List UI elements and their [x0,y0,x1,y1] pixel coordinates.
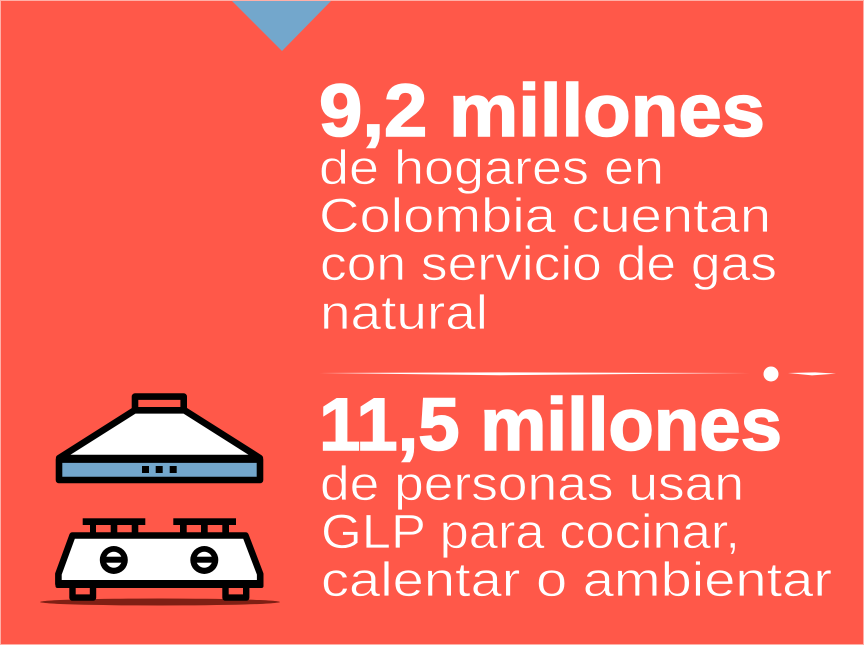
left knob [100,546,128,574]
right grate [173,518,236,534]
heading: 11,5 millones: 11,5 millones [319,383,782,466]
text: natural gas description: natural [320,287,488,340]
divider with dot [319,366,836,382]
text: LPG description: de personas usan [320,458,744,511]
heading: 9,2 millones: 9,2 millones [319,69,765,152]
text: natural gas description: de hogares en [319,142,664,195]
text: LPG description [320,458,832,607]
right knob [190,546,218,574]
text: natural gas description [319,142,777,340]
icon: gas stove [56,518,264,598]
shadow under stove [40,598,280,606]
text: LPG description: GLP para cocinar, [321,506,740,559]
top arrow marker [232,1,331,51]
stove body [58,536,260,584]
statistic: natural gas households [319,69,777,340]
text: LPG description: calentar o ambientar [321,554,832,607]
left grate [83,518,145,534]
text: natural gas description: con servicio de gas [320,238,777,291]
text: natural gas description: Colombia cuentan [319,190,771,243]
statistic: LPG users [319,383,832,607]
stove feet [72,584,246,598]
icon: extractor hood [59,397,260,480]
